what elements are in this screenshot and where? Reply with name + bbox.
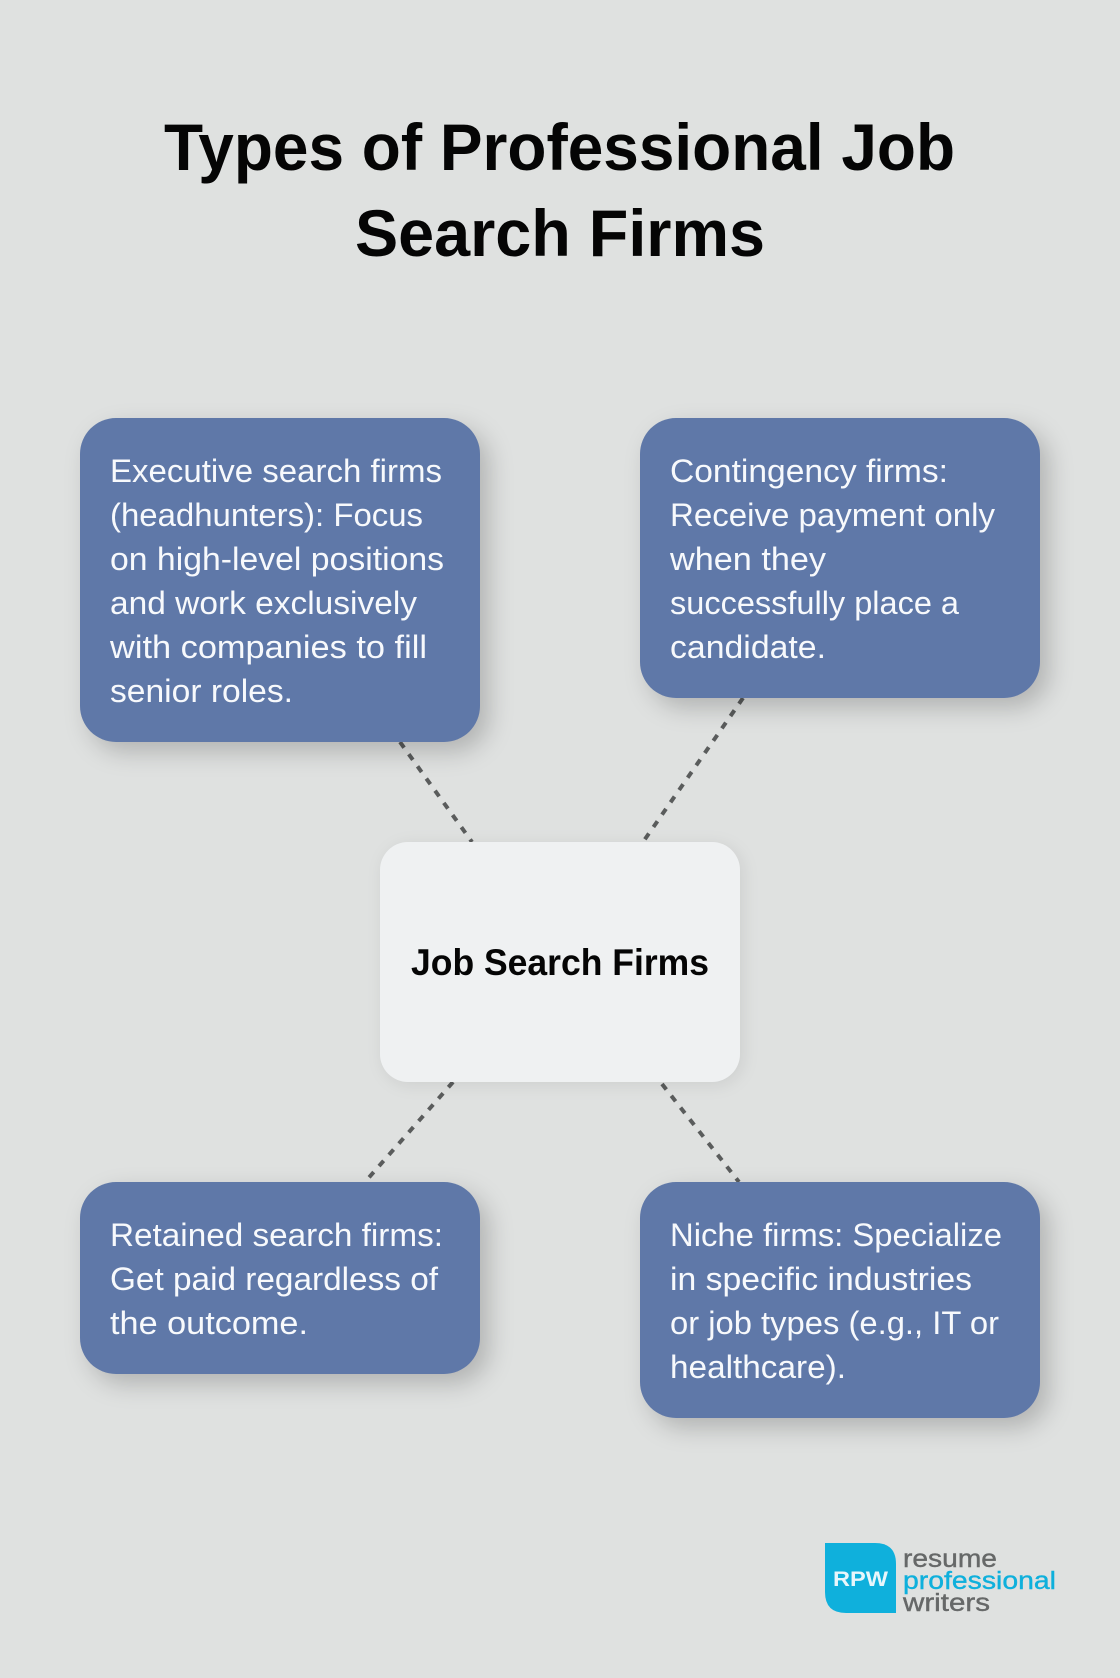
logo: resume professional writers: writers: [902, 1589, 990, 1617]
panel: executive search firms: Executive search firms: [110, 453, 442, 489]
title: [164, 110, 955, 270]
panel: retained search firms: [80, 1182, 480, 1374]
panel: executive search firms: and work exclusively: [110, 585, 417, 621]
panel: retained search firms: Get paid regardless of: [110, 1261, 438, 1297]
panel: retained search firms: the outcome.: [110, 1305, 308, 1341]
panel: niche firms: or job types (e.g., IT or: [670, 1305, 999, 1341]
connector: contingency to centre: [643, 698, 743, 842]
panel: executive search firms: senior roles.: [110, 673, 293, 709]
panel: executive search firms: (headhunters): Focus: [110, 497, 423, 533]
title: Types of Professional Job: [164, 110, 955, 184]
panel: centre node: Job Search Firms: [411, 942, 709, 983]
panel: niche firms: in specific industries: [670, 1261, 972, 1297]
panel: niche firms: Niche firms: Specialize: [670, 1217, 1002, 1253]
panel: contingency firms: when they: [669, 541, 826, 577]
panel: niche firms: healthcare).: [670, 1349, 846, 1385]
panel: contingency firms: candidate.: [670, 629, 826, 665]
panel: contingency firms: successfully place a: [670, 585, 959, 621]
panel: executive search firms: on high-level positions: [110, 541, 444, 577]
logo: resume professional writers: professional: [903, 1567, 1056, 1595]
connector: niche to centre: [662, 1084, 739, 1182]
logo: resume professional writers: resume: [903, 1545, 997, 1573]
connector: executive to centre: [400, 742, 472, 842]
panel: contingency firms: Contingency firms:: [670, 453, 948, 489]
logo: resume professional writers: [825, 1543, 1056, 1617]
panel: contingency firms: [640, 418, 1040, 698]
panel: retained search firms: Retained search firms:: [110, 1217, 443, 1253]
panel: executive search firms: with companies to fill: [109, 629, 427, 665]
panel: contingency firms: Receive payment only: [670, 497, 995, 533]
connector: retained to centre: [365, 1082, 453, 1182]
panel: centre node: [380, 842, 740, 1082]
panel: executive search firms: [80, 418, 480, 742]
panel: niche firms: [640, 1182, 1040, 1418]
logo: resume professional writers: RPW: [833, 1568, 888, 1591]
title: Search Firms: [355, 196, 765, 270]
